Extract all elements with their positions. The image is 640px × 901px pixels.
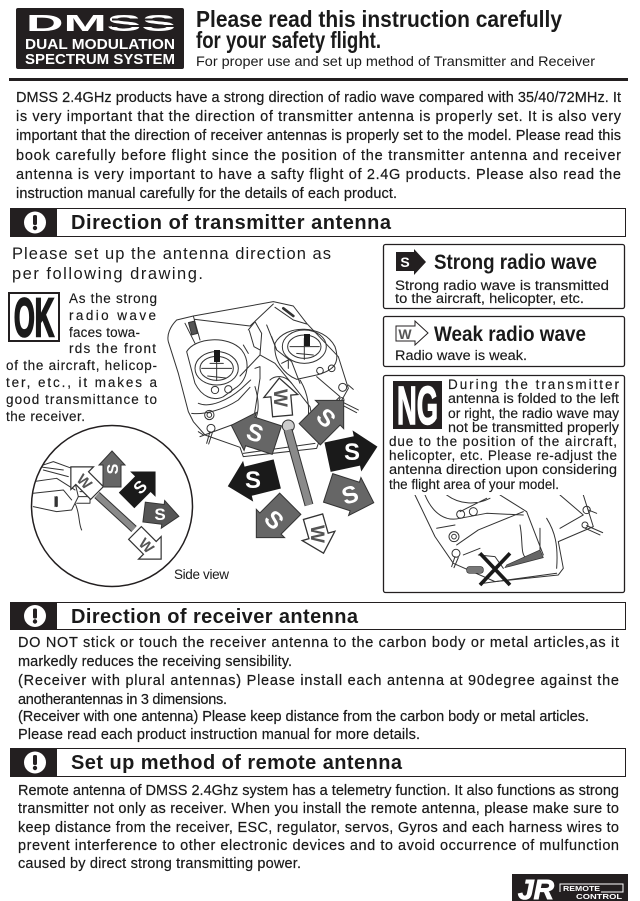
heading: remote antenna [10, 748, 626, 777]
DMSS logo: DMSS [26, 10, 176, 36]
icon: strong arrow: S [400, 254, 410, 270]
receiver antenna text: Please read each product instruction manual for more details. [18, 727, 420, 743]
arrow: strong up: S [105, 463, 122, 474]
OK badge [9, 288, 59, 348]
OK explanation text: rds the front [69, 341, 156, 356]
intro text block: book carefully before flight since the position of the transmitter antenna and receiver [16, 148, 621, 164]
arrow: strong up [99, 451, 125, 487]
instruction heading: Please set up the antenna direction as [12, 245, 331, 263]
arrow: weak lower: W [135, 535, 158, 558]
OK badge: OK [14, 288, 54, 348]
arrow: strong right black [323, 426, 382, 478]
heading: direction of receiver antenna: Direction of receiver antenna [71, 606, 359, 628]
receiver antenna text: anotherantennas in 3 dimensions. [18, 692, 227, 708]
intro text block [16, 90, 622, 202]
NG text: or right, the radio wave may [448, 406, 619, 421]
remote antenna text: transmitter not only as receiver. When you install the remote antenna, please make sure to [18, 801, 619, 817]
OK explanation text: As the strong [69, 291, 157, 306]
OK explanation text [6, 291, 157, 424]
arrow: weak lower [124, 522, 172, 570]
remote antenna text: prevent interference to other electronic devices and to avoid occurrence of mulfunction [18, 838, 619, 854]
receiver antenna text [18, 635, 619, 743]
arrow: strong upper right: S [310, 403, 341, 434]
receiver antenna text: (Receiver with plural antennas) Please install each antenna at 90degree against the [18, 673, 619, 689]
DMSS logo [16, 8, 184, 69]
NG text [389, 377, 620, 492]
NG text: the flight area of your model. [389, 477, 559, 492]
NG text: helicopter, etc. Please re-adjust the [389, 448, 617, 463]
NG text: antenna direction upon considering [389, 462, 617, 477]
X mark [480, 553, 510, 585]
instruction heading: per following drawing. [12, 265, 203, 283]
DMSS logo: DUAL MODULATION [25, 37, 175, 53]
panel: strong radio wave: Strong radio wave is transmitted [395, 278, 609, 293]
NG text: due to the position of the aircraft, [389, 434, 617, 449]
panel: strong radio wave [384, 244, 624, 308]
arrow: weak up [262, 377, 300, 417]
arrow: weak upper [60, 456, 108, 504]
arrow: strong upper left [225, 406, 283, 459]
title [196, 6, 562, 53]
arrow: strong upper left: S [243, 418, 267, 449]
receiver antenna text: (Receiver with one antenna) Please keep distance from the carbon body or metal articles. [18, 709, 589, 725]
panel: NG warning [384, 376, 624, 592]
intro text block: instruction manual carefully for the details of each product. [16, 186, 397, 202]
arrow: strong black: S [130, 477, 151, 498]
heading: remote antenna: Set up method of remote antenna [71, 752, 403, 774]
side view caption: Side view [174, 567, 229, 582]
heading: direction of transmitter antenna: Direction of transmitter antenna [71, 212, 392, 234]
title: for your safety flight. [196, 27, 381, 53]
remote antenna text [18, 783, 619, 872]
OK explanation text: faces towa- [69, 325, 140, 340]
OK explanation text: ter, etc., it makes a [6, 375, 157, 390]
remote antenna text: keep distance from the receiver, ESC, regulator, servos, Gyros and each harness wires to [18, 820, 619, 836]
arrow: strong right: S [154, 505, 166, 524]
NG text: During the transmitter [448, 377, 620, 392]
panel: weak radio wave: Weak radio wave [434, 323, 586, 346]
JR remote control logo [512, 874, 628, 901]
intro text block: antenna is very important to have a safty flight of 2.4G products. Please also read the [16, 167, 621, 183]
NG text: antenna is folded to the left [448, 391, 619, 406]
icon: weak arrow: W [398, 326, 412, 342]
DMSS logo: SPECTRUM SYSTEM [25, 52, 175, 68]
NG text: not be transmitted properly [448, 420, 619, 435]
panel: strong radio wave: Strong radio wave [434, 251, 597, 274]
arrow: strong lower left [242, 490, 304, 552]
remote antenna text: caused by direct strong transmitting power. [18, 856, 301, 872]
panel: weak radio wave: Radio wave is weak. [395, 348, 527, 363]
NG transmitter drawing [415, 495, 603, 585]
panel: strong radio wave: to the aircraft, helicopter, etc. [395, 291, 584, 306]
intro text block: DMSS 2.4GHz products have a strong direction of radio wave compared with 35/40/72MHz. It [16, 90, 621, 106]
OK explanation text: good transmittance to [6, 392, 157, 407]
arrow: weak upper: W [73, 471, 96, 494]
title: Please read this instruction carefully [196, 6, 562, 32]
JR remote control logo: REMOTE [563, 886, 600, 893]
NG badge [393, 376, 442, 436]
arrow: strong lower left: S [258, 505, 289, 536]
arrow: weak lower [297, 512, 340, 558]
heading: direction of receiver antenna [10, 602, 626, 630]
transmitter main drawing [168, 302, 358, 457]
remote antenna text: Remote antenna of DMSS 2.4Ghz system has a telemetry function. It also functions as strong [18, 783, 619, 799]
arrow: strong right black: S [344, 439, 360, 466]
subtitle: For proper use and set up method of Transmitter and Receiver [196, 53, 595, 69]
OK explanation text: of the aircraft, helicop- [6, 358, 157, 373]
panel: weak radio wave [384, 316, 624, 366]
instruction heading [12, 245, 331, 283]
OK explanation text: radio wave [69, 308, 156, 323]
JR remote control logo: CONTROL [576, 894, 623, 901]
side view circle diagram [32, 426, 192, 586]
icon: strong arrow [396, 249, 426, 275]
arrow: weak up: W [269, 389, 290, 407]
arrow: weak lower: W [306, 525, 327, 543]
icon: weak arrow [396, 321, 428, 345]
receiver antenna text: markedly reduces the receiving sensibility. [18, 654, 292, 670]
arrow: strong right [142, 498, 181, 530]
arrow: strong left black: S [245, 467, 261, 494]
intro text block: important that the direction of receiver antennas is properly set to the model. Please read this [16, 128, 621, 144]
receiver antenna text: DO NOT stick or touch the receiver antenna to the carbon body or metal articles,as it [18, 635, 619, 651]
arrow: strong left black [223, 454, 282, 507]
heading: direction of transmitter antenna [10, 208, 626, 237]
antenna side view [97, 495, 134, 529]
OK explanation text: the receiver. [6, 409, 85, 424]
joystick sticks [214, 334, 310, 362]
NG badge: NG [397, 376, 438, 436]
arrow: strong right lower: S [339, 480, 362, 511]
main antenna [288, 430, 309, 505]
arrow: strong black [114, 459, 168, 513]
arrow: strong right lower [322, 469, 380, 522]
intro text block: is very important that the direction of transmitter antenna is properly set. It is also very [16, 109, 622, 125]
arrow: strong upper right [296, 386, 358, 448]
